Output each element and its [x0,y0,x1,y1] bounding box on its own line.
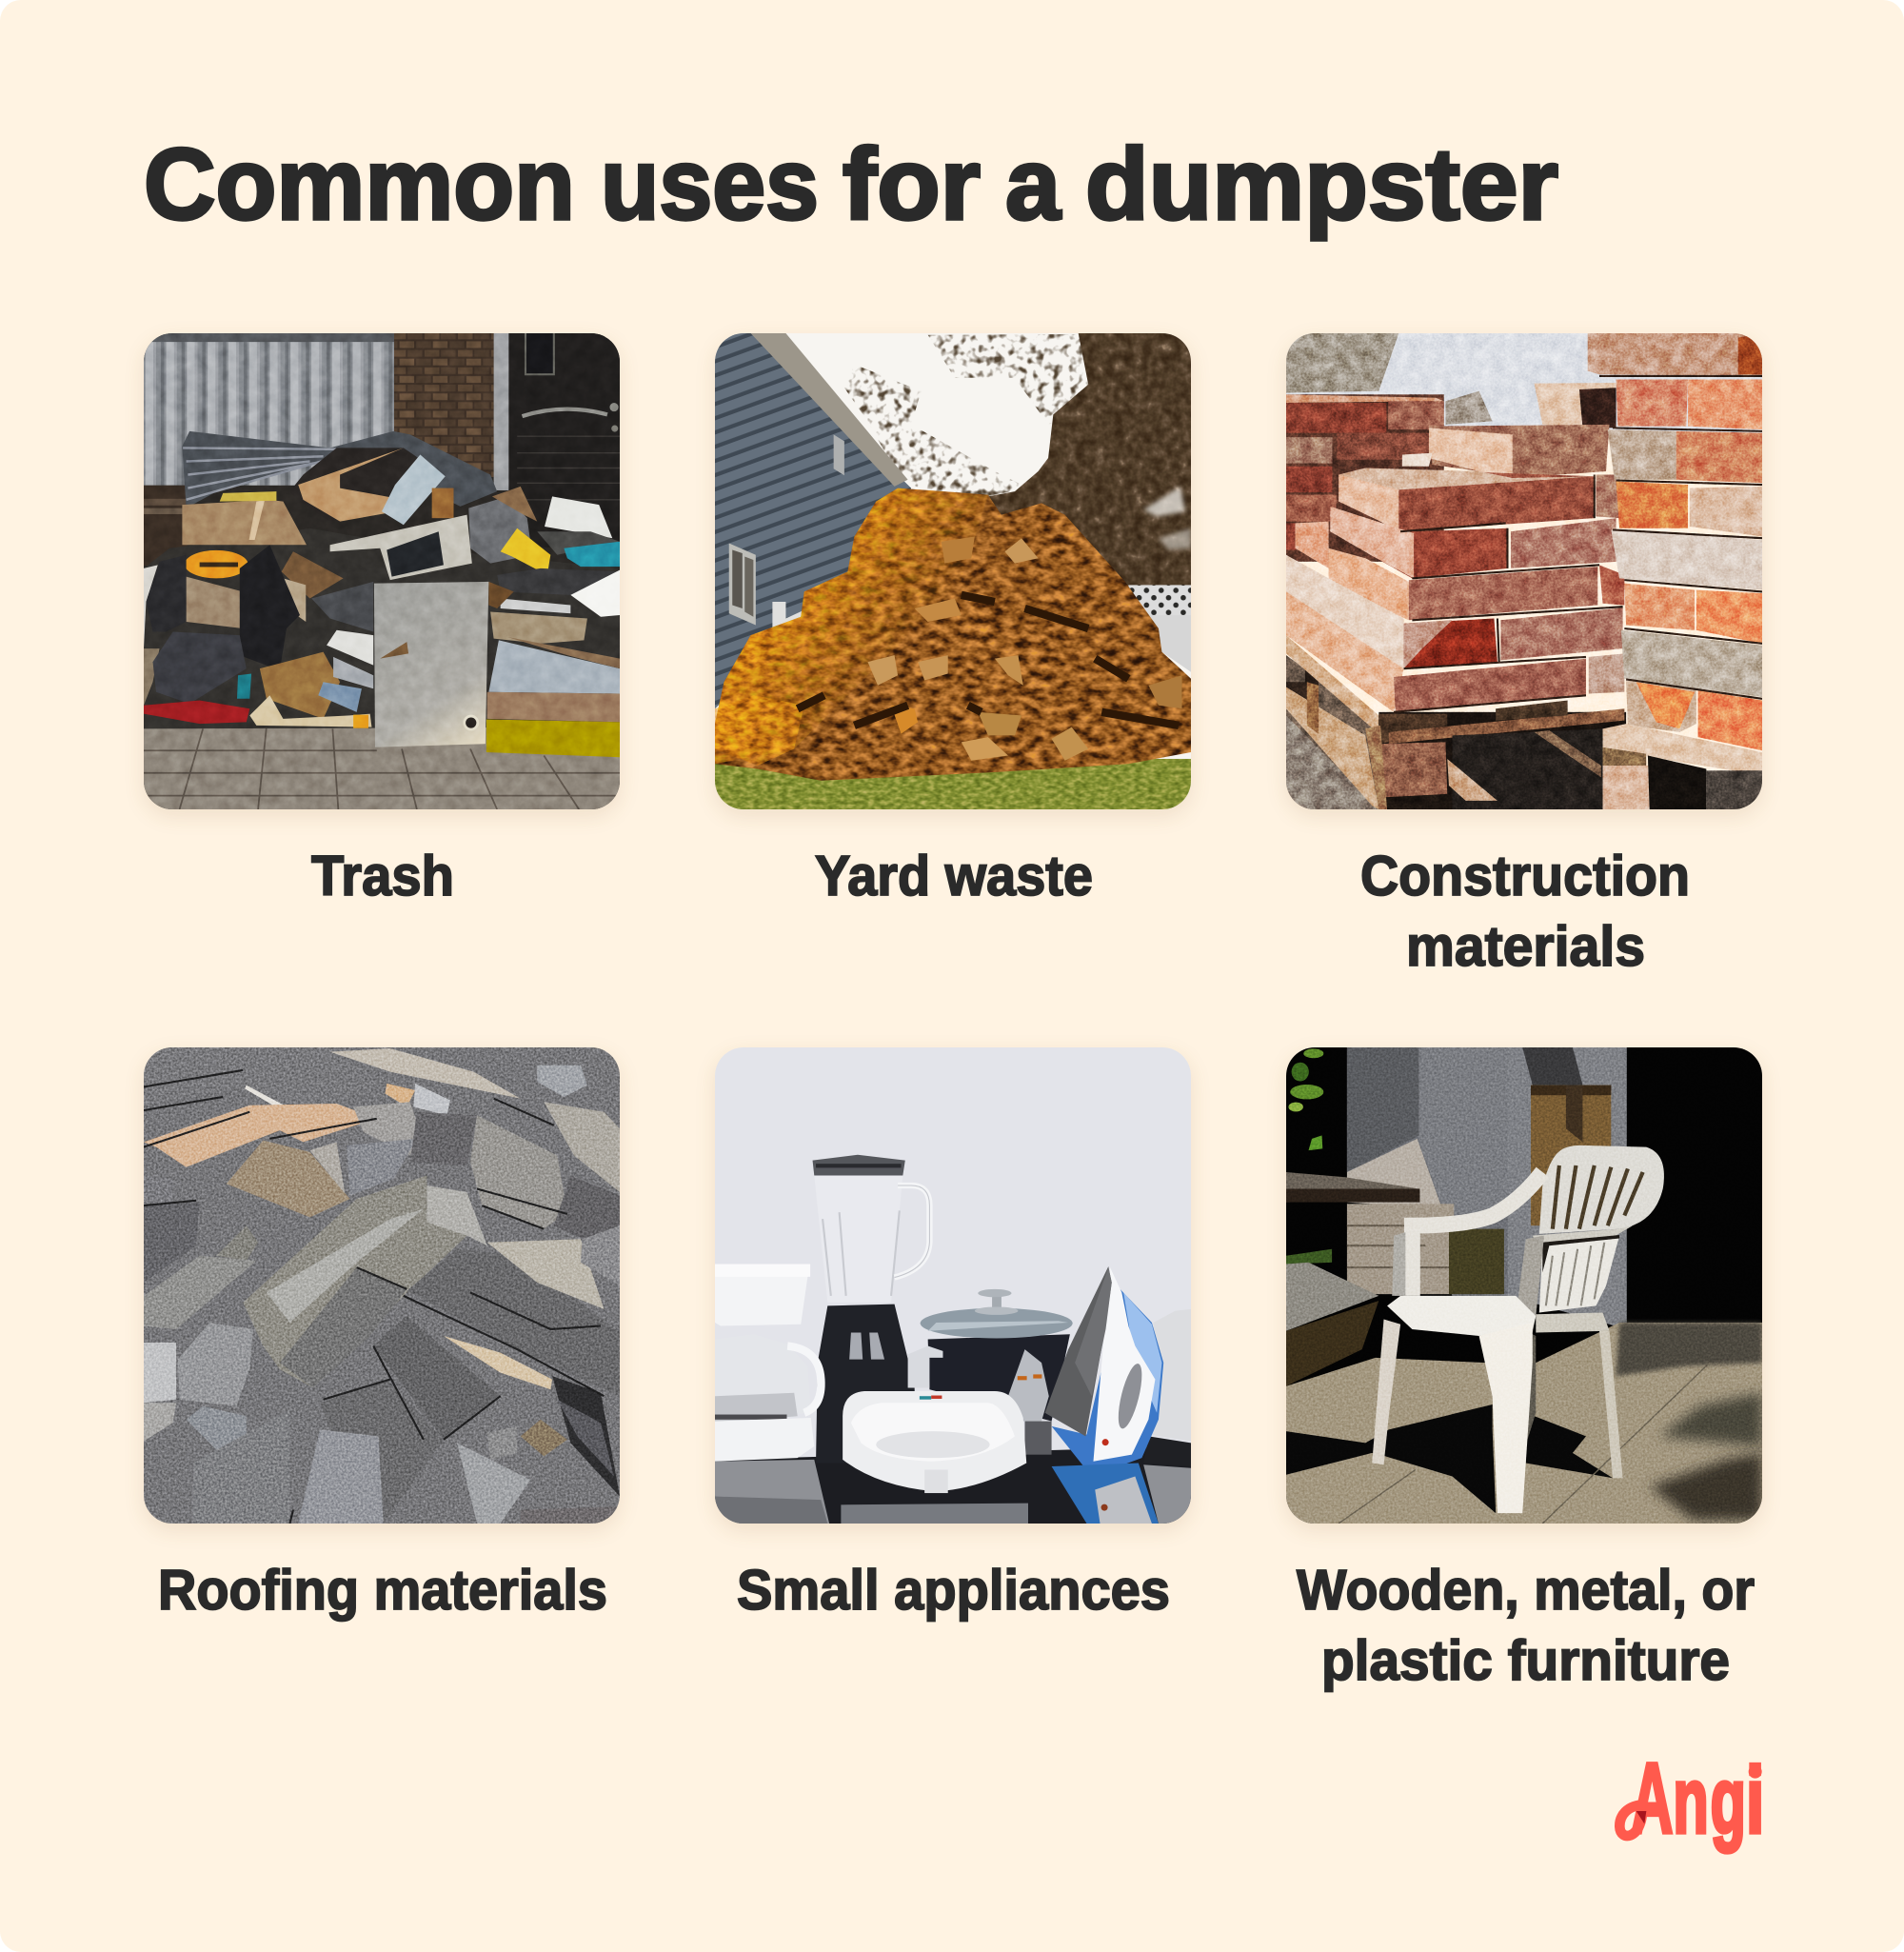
logo: Angi: n [1673,1747,1709,1852]
label: Roofing materials: Roofing materials [158,1559,607,1622]
panel: Construction materials [1281,333,1767,978]
title: Common [144,127,575,241]
label: Wooden, metal, or plastic furniture: Wooden, metal, or [1297,1559,1755,1622]
panel: Yard waste [710,333,1196,907]
title: uses [601,127,819,241]
title: for [843,127,981,241]
title: dumpster [1085,127,1558,241]
panel: Small appliances [710,1047,1196,1623]
label: Small appliances: Small appliances [737,1559,1170,1622]
panel: Roofing materials [139,1047,625,1623]
logo: Angi: A [1631,1743,1673,1854]
photo: stacked bricks on pallets [1286,333,1762,809]
label: Construction materials: Construction [1360,845,1690,907]
photo: pile of leaves [715,333,1191,809]
title: a [1005,127,1061,241]
panel: Wooden, metal, or plastic furniture [1281,1047,1767,1693]
text: plastic furniture [1321,1629,1730,1692]
logo: Angi [1615,1743,1764,1855]
photo: pile of trash [144,333,620,809]
photo: kitchen appliances [715,1047,1191,1524]
label: Construction materials [1360,845,1690,978]
logo: Angi: g [1711,1747,1746,1852]
logo: Angi: i [1746,1747,1764,1852]
label: Trash: Trash [311,845,454,907]
title [144,127,1559,242]
photo: torn roof shingles [144,1047,620,1524]
text: materials [1406,915,1645,978]
label: Wooden, metal, or plastic furniture [1296,1559,1755,1693]
label: Yard waste: Yard waste [815,845,1093,907]
photo: white plastic chair [1286,1047,1762,1524]
panel: Trash [139,333,625,907]
